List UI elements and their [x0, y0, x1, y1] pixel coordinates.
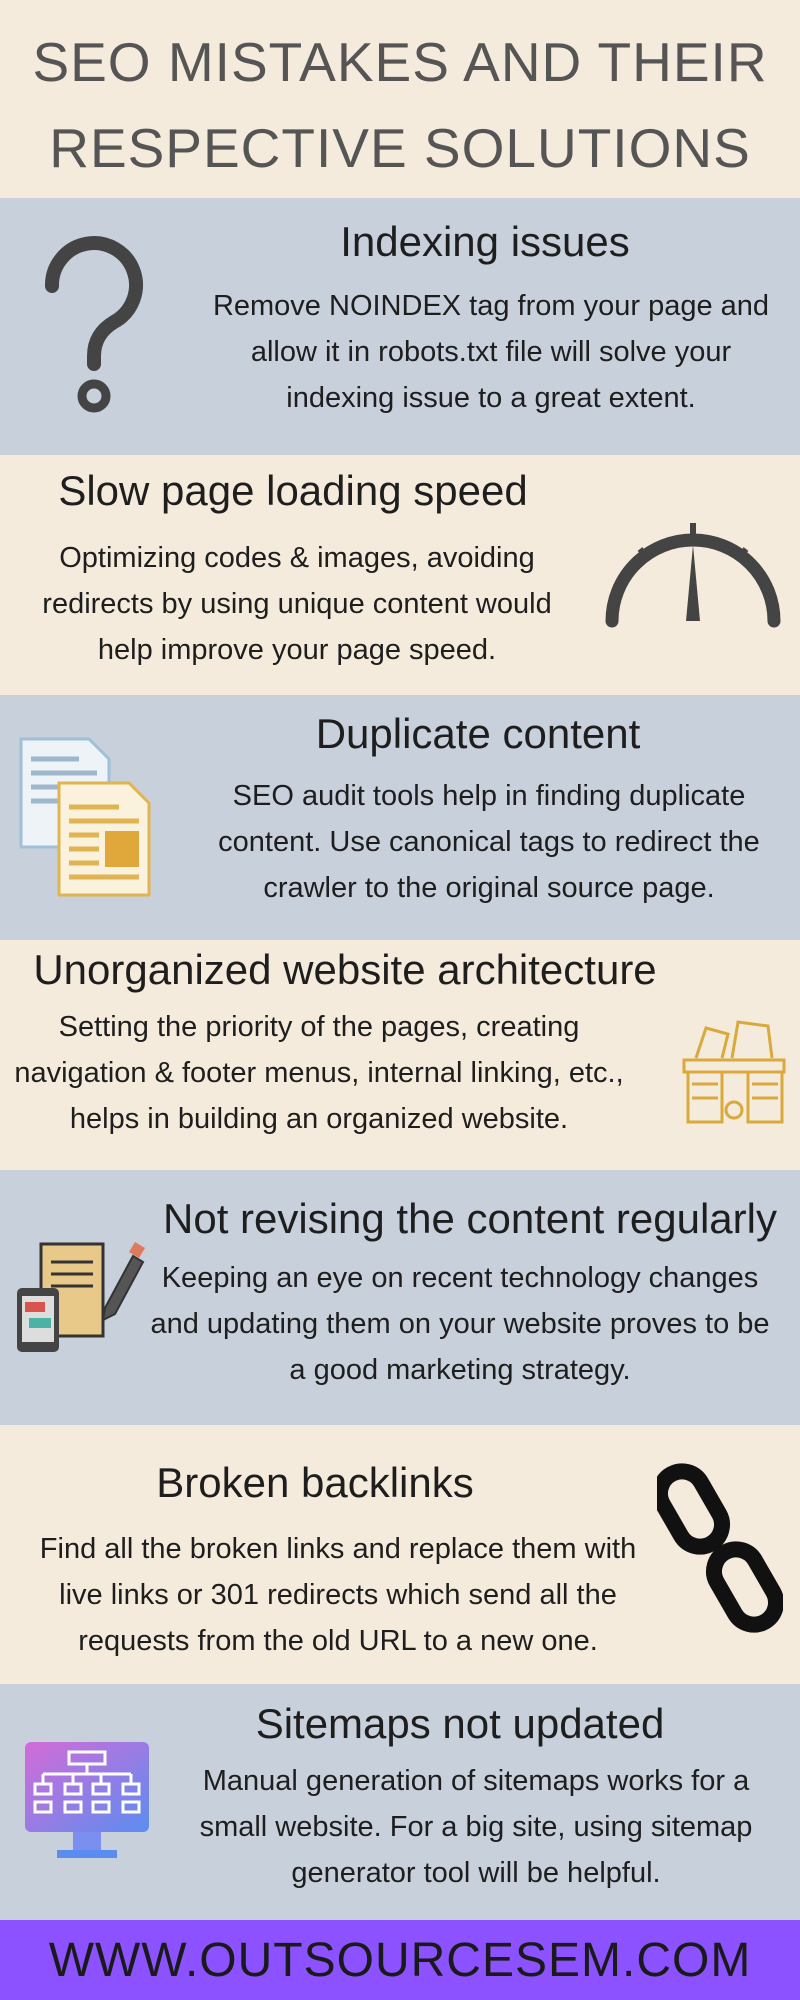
- text: Keeping an eye on recent technology changes: [162, 1262, 758, 1294]
- heading: Duplicate content: [316, 710, 640, 757]
- heading: Broken backlinks: [156, 1459, 474, 1506]
- text: [14, 1011, 624, 1135]
- panel: broken backlinks: [0, 1425, 800, 1684]
- text: [42, 542, 552, 666]
- text: Optimizing codes & images, avoiding: [59, 542, 535, 574]
- text: crawler to the original source page.: [263, 872, 715, 904]
- text: [218, 780, 760, 904]
- title: [0, 0, 800, 198]
- text: [150, 1262, 770, 1386]
- text: [40, 1533, 636, 1657]
- title: SEO MISTAKES AND THEIR: [32, 31, 768, 93]
- text: requests from the old URL to a new one.: [78, 1625, 598, 1657]
- text: navigation & footer menus, internal linking, etc.,: [14, 1057, 624, 1089]
- text: help improve your page speed.: [98, 634, 496, 666]
- panel: unorganized website architecture: [0, 940, 800, 1170]
- text: [200, 1765, 752, 1889]
- text: redirects by using unique content would: [42, 588, 552, 620]
- text: [213, 290, 769, 414]
- icon: gauge: [606, 523, 780, 628]
- text: generator tool will be helpful.: [291, 1857, 661, 1889]
- heading: Slow page loading speed: [58, 467, 528, 514]
- text: content. Use canonical tags to redirect the: [218, 826, 760, 858]
- panel: sitemaps not updated: [0, 1684, 800, 1920]
- heading: Sitemaps not updated: [256, 1700, 664, 1747]
- text: a good marketing strategy.: [289, 1354, 631, 1386]
- text: SEO audit tools help in finding duplicate: [233, 780, 745, 812]
- panel: not revising content: [0, 1170, 800, 1425]
- text: Setting the priority of the pages, creating: [59, 1011, 579, 1043]
- text: Find all the broken links and replace them with: [40, 1533, 636, 1565]
- panel: slow page loading speed: [0, 455, 800, 695]
- panel: duplicate content: [0, 695, 800, 940]
- text: live links or 301 redirects which send all the: [59, 1579, 617, 1611]
- text: Remove NOINDEX tag from your page and: [213, 290, 769, 322]
- icon: question mark: [45, 236, 144, 412]
- text: indexing issue to a great extent.: [286, 382, 696, 414]
- title: RESPECTIVE SOLUTIONS: [49, 117, 751, 179]
- text: allow it in robots.txt file will solve your: [251, 336, 731, 368]
- panel: indexing issues: [0, 198, 800, 455]
- text: helps in building an organized website.: [70, 1103, 568, 1135]
- footer: [0, 1920, 800, 2000]
- heading: Indexing issues: [340, 218, 630, 265]
- heading: Unorganized website architecture: [33, 946, 657, 993]
- text: and updating them on your website proves to be: [150, 1308, 770, 1340]
- icon: messy desk: [682, 1020, 786, 1124]
- heading: Not revising the content regularly: [163, 1195, 777, 1242]
- icon: document and pencil: [17, 1242, 145, 1352]
- icon: documents: [20, 738, 150, 896]
- icon: broken chain: [657, 1463, 783, 1633]
- text: Manual generation of sitemaps works for a: [203, 1765, 749, 1797]
- footer: WWW.OUTSOURCESEM.COM: [49, 1934, 751, 1987]
- text: small website. For a big site, using sitemap: [200, 1811, 752, 1843]
- icon: monitor sitemap: [25, 1742, 149, 1858]
